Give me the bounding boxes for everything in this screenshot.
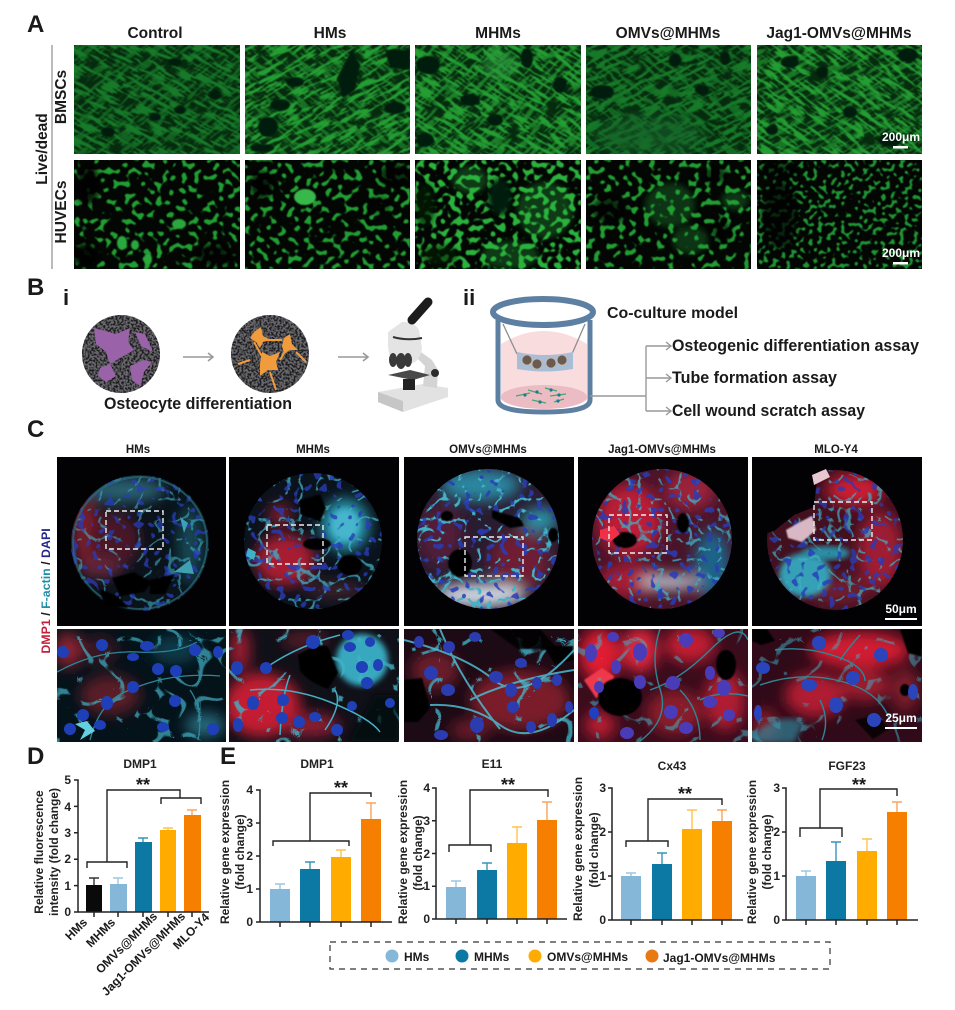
arrow xyxy=(338,353,368,361)
column headings xyxy=(126,444,858,456)
panel C: confocal images xyxy=(27,416,922,743)
panel E: gene expression charts xyxy=(218,743,918,929)
BMSCs Jag1-OMVs@MHMs micrograph xyxy=(757,45,922,154)
error bars xyxy=(451,802,552,887)
MLO-Y4 zoom box xyxy=(814,502,872,540)
chart: E11 xyxy=(396,757,567,926)
BMSCs Control micrograph xyxy=(74,45,240,154)
chart title: DMP1 xyxy=(300,757,334,771)
significance bracket xyxy=(800,789,897,837)
HMs zoom image xyxy=(54,629,226,742)
icon: microscope xyxy=(378,302,448,412)
significance stars: ** xyxy=(852,775,866,795)
y tick labels xyxy=(423,781,430,926)
icon: microsphere with orange cells xyxy=(231,315,309,393)
significance stars: ** xyxy=(678,784,692,804)
panel B: schematic xyxy=(27,274,920,420)
x tick labels: MLO-Y4 xyxy=(170,910,212,952)
y tick labels: 0 xyxy=(64,905,71,919)
y tick labels: 2 xyxy=(64,852,71,866)
assay labels: Tube formation assay xyxy=(672,369,838,387)
y axis title xyxy=(32,788,61,916)
icon: microsphere with purple cells xyxy=(82,315,160,393)
HUVECs Control micrograph xyxy=(72,160,240,269)
significance bracket xyxy=(87,790,201,868)
chart title: FGF23 xyxy=(828,759,866,773)
panel D: fluorescence bar chart xyxy=(27,743,212,999)
legend item: HMs: HMs xyxy=(404,950,430,964)
y axis title: Relative gene expression xyxy=(218,780,232,924)
bars xyxy=(796,812,907,920)
arrow xyxy=(183,353,213,361)
significance stars: ** xyxy=(334,778,348,798)
y tick labels: 1 xyxy=(246,882,253,896)
panel letter A: A xyxy=(27,11,44,38)
MHMs zoom box xyxy=(267,525,323,564)
y tick labels: 3 xyxy=(423,814,430,828)
scale bar: 25um: 25μm xyxy=(885,711,917,725)
y tick labels xyxy=(773,781,780,927)
y axis title: (fold change) xyxy=(233,814,247,890)
error bars xyxy=(626,810,727,876)
y tick labels: 4 xyxy=(64,800,71,814)
legend item: HMs xyxy=(386,950,430,964)
branching arrows xyxy=(590,342,671,415)
axes xyxy=(782,788,918,925)
axes xyxy=(256,790,392,927)
assay labels: Cell wound scratch assay xyxy=(672,402,866,420)
column headings: OMVs@MHMs xyxy=(616,25,720,42)
column headings: MLO-Y4 xyxy=(814,444,858,456)
HMs whole microsphere xyxy=(57,457,226,626)
row label: BMSCs: BMSCs xyxy=(53,70,70,124)
MHMs whole microsphere xyxy=(229,457,399,626)
scale bar: HUVECs 200um: 200μm xyxy=(882,246,920,260)
y tick labels: 0 xyxy=(423,912,430,926)
y tick labels: 5 xyxy=(64,773,71,787)
error bars xyxy=(89,810,197,885)
column headings: MHMs xyxy=(296,444,330,456)
chart title: DMP1 xyxy=(123,757,157,771)
bars xyxy=(270,819,381,922)
column headings: Jag1-OMVs@MHMs xyxy=(766,25,912,42)
chart title: E11 xyxy=(482,757,503,771)
legend item: MHMs: MHMs xyxy=(474,950,510,964)
label: Co-culture model: Co-culture model xyxy=(607,305,738,322)
significance bracket xyxy=(626,799,722,847)
y tick labels: 4 xyxy=(423,781,430,795)
chart: DMP1 xyxy=(218,757,392,929)
y tick labels: 2 xyxy=(773,825,780,839)
y axis title xyxy=(571,777,601,921)
legend item: Jag1-OMVs@MHMs: Jag1-OMVs@MHMs xyxy=(663,951,776,965)
OMVs@MHMs zoom image xyxy=(404,629,574,742)
legend item: OMVs@MHMs: OMVs@MHMs xyxy=(547,950,628,964)
y tick labels: 3 xyxy=(64,826,71,840)
column headings: OMVs@MHMs xyxy=(449,444,527,456)
y tick labels: 1 xyxy=(599,869,606,883)
MHMs zoom image xyxy=(224,628,399,742)
error bars xyxy=(801,802,902,876)
column headings: HMs xyxy=(314,25,346,42)
x tick labels: Jag1-OMVs@MHMs xyxy=(99,909,188,999)
significance stars: ** xyxy=(501,775,515,795)
y tick labels: 0 xyxy=(773,913,780,927)
assay labels: Osteogenic differentiation assay xyxy=(672,337,920,355)
panel letter D: D xyxy=(27,743,44,770)
OMVs@MHMs zoom box xyxy=(465,537,523,576)
label ii: ii xyxy=(463,285,475,310)
significance bracket xyxy=(273,793,371,846)
bars xyxy=(446,820,557,919)
y tick labels: 1 xyxy=(64,879,71,893)
chart title: Cx43 xyxy=(658,759,687,773)
MLO-Y4 zoom image xyxy=(752,629,922,743)
legend xyxy=(330,942,830,969)
y tick labels: 0 xyxy=(599,913,606,927)
panel letter C: C xyxy=(27,416,44,443)
y tick labels: 0 xyxy=(246,915,253,929)
bars xyxy=(621,821,732,920)
axes xyxy=(74,780,209,917)
BMSCs HMs micrograph xyxy=(245,45,410,154)
y axis title: Relative gene expression xyxy=(745,780,759,924)
y axis title: Relative gene expression xyxy=(571,777,585,921)
HUVECs MHMs micrograph xyxy=(415,160,581,269)
BMSCs OMVs@MHMs micrograph xyxy=(586,45,751,154)
HUVECs HMs micrograph xyxy=(245,160,411,269)
y tick labels: 2 xyxy=(423,847,430,861)
column headings: MHMs xyxy=(475,25,521,42)
x tick labels: MHMs xyxy=(83,915,118,950)
HUVECs OMVs@MHMs micrograph xyxy=(586,160,751,269)
row label: Live/dead: Live/dead xyxy=(34,113,51,185)
OMVs@MHMs whole microsphere xyxy=(404,457,574,626)
chart: Cx43 xyxy=(571,759,743,927)
y axis title: (fold change) xyxy=(760,814,774,890)
Jag1-OMVs@MHMs whole microsphere xyxy=(578,457,748,626)
legend item: MHMs xyxy=(456,950,510,964)
panel A: live/dead images xyxy=(28,16,922,269)
y axis title: Relative fluorescence xyxy=(32,790,46,914)
axes xyxy=(432,788,567,924)
y tick labels: 3 xyxy=(773,781,780,795)
BMSCs MHMs micrograph xyxy=(415,45,581,154)
x tick labels xyxy=(62,909,212,999)
scale bar: BMSCs 200um: 200μm xyxy=(882,130,920,144)
y axis title: intensity (fold change) xyxy=(47,788,61,916)
y axis title: (fold change) xyxy=(411,815,425,891)
label: Osteocyte differentiation: Osteocyte differentiation xyxy=(104,395,292,413)
y tick labels xyxy=(246,783,253,929)
y axis title xyxy=(396,780,425,924)
y tick labels xyxy=(599,781,606,927)
significance bracket xyxy=(449,790,548,852)
chart: FGF23 xyxy=(745,759,918,927)
column headings xyxy=(127,25,912,42)
y axis title: (fold change) xyxy=(587,812,601,888)
x tick labels: HMs xyxy=(62,915,90,943)
HMs zoom box xyxy=(106,511,163,549)
legend box xyxy=(330,942,830,969)
stain label: DMP1 / F-actin / DAPI xyxy=(39,528,53,654)
y tick labels: 2 xyxy=(599,825,606,839)
icon: co-culture beaker xyxy=(493,299,593,412)
Jag1-OMVs@MHMs zoom box xyxy=(609,515,667,553)
y tick labels: 1 xyxy=(423,879,430,893)
HUVECs Jag1-OMVs@MHMs micrograph xyxy=(757,160,922,269)
row label: HUVECs: HUVECs xyxy=(53,181,70,243)
assay labels xyxy=(672,337,920,420)
panel letter B: B xyxy=(27,274,44,301)
column headings: Jag1-OMVs@MHMs xyxy=(608,444,716,456)
y axis title xyxy=(218,780,247,924)
y tick labels xyxy=(64,773,71,919)
column headings: HMs xyxy=(126,444,150,456)
y tick labels: 3 xyxy=(246,816,253,830)
panel letter E: E xyxy=(220,743,236,770)
MLO-Y4 whole microsphere xyxy=(752,457,922,626)
y tick labels: 1 xyxy=(773,869,780,883)
y tick labels: 3 xyxy=(599,781,606,795)
scale bar: 50um: 50μm xyxy=(885,602,917,616)
y axis title xyxy=(745,780,774,924)
bars xyxy=(86,815,201,912)
x tick labels: OMVs@MHMs xyxy=(93,909,160,976)
label i: i xyxy=(63,285,69,310)
significance stars: ** xyxy=(136,775,150,795)
Jag1-OMVs@MHMs zoom image xyxy=(578,627,748,742)
column headings: Control xyxy=(127,25,183,42)
y axis title: Relative gene expression xyxy=(396,780,410,924)
y tick labels: 2 xyxy=(246,849,253,863)
error bars xyxy=(275,803,376,889)
y tick labels: 4 xyxy=(246,783,253,797)
axes xyxy=(608,788,743,925)
